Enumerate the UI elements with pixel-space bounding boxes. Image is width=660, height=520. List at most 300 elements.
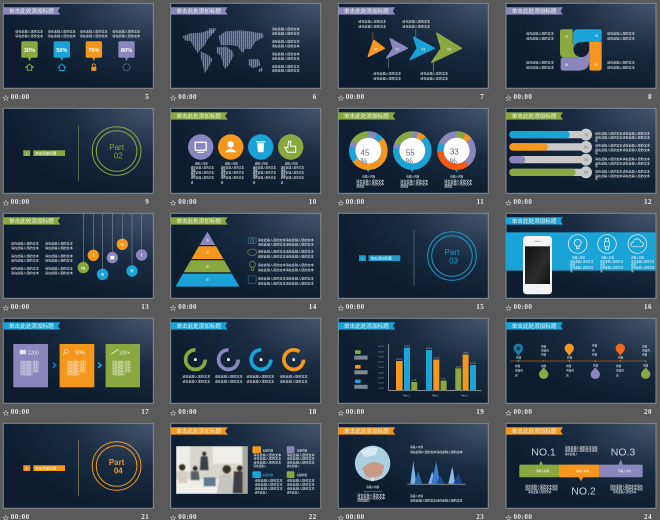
donut 55% value: 55	[406, 148, 415, 157]
text columns: 请在	[570, 262, 576, 266]
footer: 00:00	[346, 198, 365, 206]
right text: 请输入内容	[410, 445, 423, 449]
text blocks	[182, 374, 308, 383]
donut 55% value: %	[406, 157, 413, 166]
text blocks: 请在此输入您的文本	[48, 28, 76, 33]
text blocks: 请	[595, 138, 598, 142]
donut 45% value	[360, 148, 370, 166]
pinwheel diagram: 01	[565, 34, 568, 38]
timeline text: 内	[616, 373, 619, 377]
bar chart: 90.1%	[404, 345, 410, 347]
text columns: 请在此输入您的文本	[253, 175, 276, 179]
slide frame	[3, 318, 153, 403]
text columns: 请在此输入您的文本	[221, 165, 244, 169]
tri-colour bar: 请输入内容	[576, 469, 589, 473]
text blocks: 请在此输入您的文本请在此输入您的文本	[595, 143, 650, 148]
timeline	[510, 360, 647, 362]
panel: slide 18	[170, 318, 321, 416]
text blocks: 请在此输入您的文本请在此输入您的文本	[595, 156, 650, 161]
title ribbon	[171, 112, 228, 120]
pinwheel diagram	[560, 29, 602, 71]
text blocks: 请在此输入您的文本	[80, 33, 108, 38]
footer: 00:00	[178, 93, 197, 101]
panel: slide 10	[170, 108, 321, 206]
card: 100+: 请在此输入您的	[112, 366, 131, 370]
panel: slide 20	[506, 318, 656, 416]
progress bars: 30	[584, 145, 588, 149]
footer: 00:00	[514, 93, 532, 101]
footer: 16	[644, 303, 652, 311]
section label: 4	[26, 466, 28, 470]
timeline text: 内容	[515, 364, 521, 368]
feature text: 请在此输入您的文本	[253, 455, 281, 460]
text blocks: 请在此输入您的文本	[45, 253, 73, 258]
donut 55%	[396, 134, 428, 167]
card: 80%: 请在此输入您的	[67, 363, 86, 367]
text blocks: 请在此输入您的文本	[373, 70, 401, 75]
bar chart: Part 1	[403, 394, 410, 397]
text blocks: 请在此输入您的文本	[45, 240, 73, 245]
footer	[170, 198, 317, 206]
text columns: 请在	[281, 168, 286, 172]
text blocks: 请	[595, 164, 598, 168]
part label: Part	[109, 143, 125, 152]
handshake globe image	[355, 446, 390, 481]
slide frame	[338, 213, 488, 298]
title ribbon	[3, 217, 60, 225]
feature text: 请在此输入您的文本	[255, 477, 283, 482]
legend	[354, 350, 368, 389]
text blocks: 请在此输入您的文本请在	[565, 447, 598, 452]
donut 33%	[440, 134, 473, 167]
title ribbon: 单击此处添加标题	[344, 322, 389, 330]
text captions: 请在此	[444, 184, 452, 188]
donut 45% value: 45	[361, 148, 370, 157]
NO labels: NO.2	[571, 486, 596, 498]
text columns: 请在此输入您的文本	[600, 265, 624, 269]
divider line	[413, 230, 415, 286]
slide frame	[338, 318, 488, 403]
text blocks: 请在此输入您的文本请在此输入您的文本	[595, 130, 650, 135]
slide frame	[338, 423, 488, 508]
part label	[109, 143, 125, 160]
text blocks: 请在此输入您的文本	[11, 265, 39, 270]
title ribbon: 单击此处添加标题	[344, 112, 389, 120]
text columns: 请在	[191, 168, 196, 172]
feature text: 请在此输入	[287, 490, 300, 494]
pinwheel diagram: 02	[595, 34, 598, 38]
text captions	[356, 170, 472, 188]
text columns: 请在此输入您的文本	[191, 165, 214, 169]
panel: slide 12	[506, 108, 656, 206]
bar chart: 44.0%	[456, 366, 462, 368]
smartphone	[523, 236, 552, 294]
footer	[3, 513, 149, 520]
text blocks: 请在此输入您的文本	[272, 30, 300, 35]
text blocks: 请在此输入您的文本	[272, 68, 300, 73]
panel: slide 22	[170, 423, 321, 520]
progress bars: 70	[584, 133, 588, 137]
feature text: 请在此输入您的文本	[255, 481, 283, 486]
text blocks: 请在此输入您的文本请在此输入您的文本	[258, 237, 314, 242]
text columns: 请在此输入您的文本	[191, 175, 214, 179]
text columns: 请在	[600, 262, 606, 266]
text columns	[570, 255, 655, 273]
pyramid: 请	[206, 238, 209, 242]
pyramid: 请	[206, 250, 209, 254]
text columns	[191, 161, 304, 184]
feature text: 请在此输入	[253, 464, 267, 468]
text blocks: 请在此输入您的文本	[613, 490, 637, 494]
text blocks: 请在此输入您的文本请在此输入您的文本	[595, 135, 650, 140]
percentage tags	[21, 41, 135, 61]
panel: slide 7	[338, 3, 488, 101]
text blocks: 请在此输入您的文本请在此输入您的文本	[258, 281, 314, 286]
text blocks: 请在此输入您的文本请在	[610, 483, 643, 488]
card: 80%: 请在此输入您的	[67, 366, 86, 370]
text columns: 请输入内容	[631, 255, 644, 259]
card: 100+: 100+	[119, 350, 130, 356]
hanging social icons	[78, 213, 147, 280]
text blocks: 请在此输入您的文本	[215, 374, 243, 379]
slide frame	[3, 3, 153, 88]
text captions: 请在此	[400, 184, 408, 188]
footer: 8	[648, 93, 652, 101]
text columns: 请在	[253, 168, 258, 172]
text columns: 请在此输入您的文本	[281, 175, 304, 179]
donut 33% value	[450, 147, 459, 166]
text blocks: 请在此输入您的文本	[112, 28, 140, 33]
timeline text: 内容	[616, 364, 622, 368]
slide frame	[338, 108, 488, 193]
bar chart: 10.0%	[378, 388, 384, 390]
text blocks: 请在此输入您的文本	[402, 19, 430, 24]
arrow sequence: 01	[374, 47, 378, 51]
text columns: 请在此输入您的文本	[253, 165, 276, 169]
section label: 单击添加标题	[35, 150, 57, 155]
text columns: 请在	[221, 173, 226, 177]
text columns: 请	[191, 180, 194, 184]
feature text	[253, 448, 315, 494]
part label: Part	[109, 458, 125, 467]
arrow sequence: 03	[421, 47, 425, 51]
title ribbon: 单击此处添加标题	[512, 427, 557, 435]
feature text: 请在此输入您的文本	[287, 481, 315, 486]
title ribbon: 单击此处添加标题	[512, 7, 557, 15]
text blocks: 请	[595, 151, 598, 155]
text blocks: 请在此输入您的文本	[526, 35, 554, 40]
text columns: 请在此输入您的文本	[253, 170, 276, 174]
timeline text: 内容	[593, 363, 599, 367]
timeline text	[515, 343, 650, 377]
card: 1200: 请在此输入	[20, 372, 34, 376]
card: 80%: 请在此输入您的	[67, 360, 86, 364]
text columns: 请输入内容	[225, 161, 238, 165]
footer	[506, 93, 652, 101]
feature text: 请在此输入	[287, 464, 300, 468]
text blocks	[258, 237, 314, 286]
title ribbon: 单击此处添加标题	[512, 112, 557, 120]
footer: 00:00	[178, 303, 197, 311]
part label: Part	[445, 248, 460, 257]
footer	[170, 513, 317, 520]
slide frame	[171, 318, 321, 403]
text blocks: 请在此输入您的文本	[607, 59, 635, 64]
timeline text: 内容内	[566, 368, 574, 372]
text blocks: 请在此输入您的文本	[45, 270, 73, 275]
NO labels	[531, 446, 635, 498]
pinwheel diagram: 03	[594, 63, 598, 67]
card: 1200: 请在此输入您的	[20, 369, 39, 373]
slide frame	[171, 423, 321, 508]
text blocks: 请在此输入您的文本	[182, 378, 210, 383]
text captions: 请输入内容	[406, 174, 420, 178]
text columns: 请输入内容	[601, 255, 614, 259]
text blocks: 请在此输入您的文本请在此输入您的文本	[595, 173, 650, 178]
text columns: 请在	[253, 173, 258, 177]
footer: 18	[309, 408, 317, 416]
slide frame	[3, 108, 153, 193]
timeline text: 内容内	[642, 348, 650, 352]
footer: 14	[309, 303, 317, 311]
footer	[338, 303, 484, 311]
donut 33% value: %	[450, 157, 457, 166]
title ribbon	[171, 7, 228, 15]
footer: 15	[476, 303, 484, 311]
timeline text: 内容	[541, 352, 547, 356]
text blocks: 请在此输入您的文本	[420, 70, 448, 75]
footer	[338, 513, 484, 520]
section label	[23, 150, 65, 156]
ring centres	[194, 358, 295, 361]
text columns: 请在此输入您的文本	[221, 170, 244, 174]
title ribbon: 单击此处添加标题	[9, 7, 54, 15]
card: 100+: 请在此输入您的	[112, 363, 131, 367]
timeline text: 内	[592, 348, 595, 352]
text blocks: 请在此输入您的文本	[526, 59, 554, 64]
text columns: 请输入内容	[195, 161, 208, 165]
part rings	[92, 442, 141, 490]
text blocks: 请在此输入您的文本请在	[525, 486, 558, 491]
percentage tags: 30%	[24, 48, 35, 54]
bar chart: 40.0%	[378, 372, 384, 374]
panel: slide 9	[3, 108, 153, 206]
arrow	[98, 363, 101, 368]
text blocks: 请在此输入您的文本请在	[565, 444, 598, 449]
text blocks: 请在此输入您的文本	[373, 75, 401, 80]
text captions: 请在此输入您的文本	[444, 181, 472, 186]
timeline text: 内	[515, 373, 518, 377]
panel: slide 19	[338, 318, 488, 416]
panel: slide 5	[3, 3, 153, 101]
text blocks	[526, 30, 635, 69]
percentage tags: 50%	[56, 48, 67, 54]
NO labels: NO.3	[611, 446, 635, 458]
title ribbon	[506, 112, 563, 120]
footer: 5	[145, 93, 149, 101]
card: 1200	[13, 344, 48, 387]
text columns: 请	[631, 269, 634, 273]
text blocks: 请在此输入您的文本请在	[525, 483, 558, 488]
feature text: 请在此输入您的文本	[255, 485, 283, 490]
percentage tags: 70%	[88, 48, 100, 54]
footer: 00:00	[178, 408, 197, 416]
text blocks: 请在此输入您的文本	[11, 258, 39, 263]
card: 1200: 请在此输入您的	[20, 360, 39, 364]
footer	[3, 93, 149, 101]
bar chart: 74.1%	[434, 357, 440, 359]
footer: 9	[145, 198, 149, 206]
hanging social icons: P	[130, 269, 134, 274]
part rings	[428, 232, 476, 280]
footer: 6	[313, 93, 317, 101]
slide frame	[506, 213, 656, 298]
footer: 00:00	[11, 408, 30, 416]
title ribbon: 单击此处添加标题	[344, 427, 389, 435]
text blocks: 请在此输入您的文本	[11, 270, 39, 275]
text columns: 请	[600, 269, 603, 273]
title ribbon	[338, 427, 395, 435]
timeline text: 内容	[618, 355, 624, 359]
timeline text: 内容	[642, 352, 648, 356]
title ribbon	[506, 322, 563, 330]
text columns: 请在此输入您的文本	[570, 259, 594, 263]
slide frame	[3, 213, 153, 298]
text captions: 请在此输入您的文本	[400, 181, 428, 186]
timeline text: 内容	[516, 355, 522, 359]
hanging social icons: f	[93, 253, 95, 258]
text blocks: 请在此输入您的文本	[526, 64, 554, 69]
section label	[359, 255, 400, 261]
slide frame	[3, 423, 153, 508]
text blocks: 请在此输入您的文本请在	[610, 486, 643, 491]
pyramid	[175, 232, 239, 287]
section label: 3	[361, 256, 363, 260]
text captions: 请在此输入您的文本	[400, 178, 428, 183]
title ribbon	[506, 7, 563, 15]
slide frame	[506, 318, 656, 403]
card: 100+: 请在此输入您的	[112, 369, 131, 373]
feature text: 请在此输入您的文本	[287, 485, 315, 490]
bar chart	[378, 344, 481, 397]
text blocks: 请在此输入您的文本	[272, 43, 300, 48]
panel: slide 11	[338, 108, 488, 206]
title ribbon: 单击此处添加标题	[512, 322, 557, 330]
title ribbon: 单击此处添加标题	[176, 7, 222, 15]
arrow	[53, 363, 56, 368]
footer: 00:00	[514, 303, 532, 311]
text blocks: 请在此输入您的文本请在此输入您的文本	[258, 262, 314, 267]
text blocks: 请在此输入您的文本	[358, 19, 386, 24]
text captions: 请在此输入您的文本	[444, 178, 472, 183]
timeline text: 内容	[642, 344, 648, 348]
connectors	[373, 29, 433, 71]
text blocks: 请在此输入您的文本请在此输入您的文本	[258, 276, 314, 281]
title ribbon	[338, 322, 395, 330]
footer	[338, 198, 484, 206]
footer	[506, 198, 652, 206]
card: 100+: 请在此输入您的	[112, 360, 131, 364]
text columns: 请在此输入您的文本	[600, 259, 624, 263]
text blocks	[15, 28, 140, 38]
office meeting photo	[176, 446, 248, 494]
footer	[170, 303, 317, 311]
hanging social icons: in	[81, 265, 86, 270]
card: 1200: 1200	[28, 350, 39, 356]
text blocks: 请在此输入您的文本	[402, 23, 430, 28]
timeline text: 内容	[567, 355, 573, 359]
footer	[506, 408, 652, 416]
footer: 00:00	[178, 198, 197, 206]
spike chart	[407, 461, 465, 484]
text columns: 请在此输入您的文本	[281, 165, 304, 169]
text blocks: 请在此输入您的文本	[272, 26, 300, 31]
feature text: 标题内容	[263, 473, 273, 477]
tri-colour bar: 请输入内容	[618, 469, 631, 473]
footer: 13	[141, 303, 149, 311]
text blocks: 请在此输入您的文本	[45, 258, 73, 263]
section label	[23, 465, 65, 471]
text blocks: 请	[595, 176, 598, 180]
caption	[357, 485, 385, 502]
text captions: 请在此输入您的文本	[356, 178, 384, 183]
footer: 7	[480, 93, 484, 101]
bar chart: Part 2	[432, 394, 439, 397]
bar chart: 76.2%	[396, 359, 402, 361]
text blocks: 请在此输入您的文本请在此输入您的文本	[258, 254, 314, 259]
progress rings	[186, 350, 304, 369]
bar chart: 5.5%	[441, 378, 446, 380]
arrow sequence: 04	[447, 47, 451, 51]
footer: 00:00	[514, 408, 532, 416]
slide frame	[506, 3, 656, 88]
caption: 请在此输入	[357, 498, 371, 502]
title ribbon: 单击此处添加标题	[176, 322, 222, 330]
bar chart: 70.0%	[378, 356, 384, 358]
hanging social icons: S	[101, 272, 104, 277]
text columns: 请在此输入您的文本	[221, 175, 244, 179]
text blocks: 请在此输入您的文本	[215, 378, 243, 383]
arrow sequence: 02	[395, 47, 399, 51]
text columns: 请	[570, 269, 573, 273]
feature text: 请在此输入您的文本	[287, 452, 315, 457]
outline icon circles	[568, 235, 647, 253]
caption: 请输入内容	[366, 485, 380, 489]
bar chart: 65.1%	[470, 363, 476, 365]
text blocks: 请在此输入您的文本	[272, 55, 300, 60]
right text: 请在此输入您的文本请在此输入您的文本	[410, 449, 463, 454]
footer	[170, 93, 317, 101]
feature icons	[252, 446, 294, 478]
panel: slide 23	[338, 423, 488, 520]
panel: slide 8	[506, 3, 656, 101]
text columns: 请在	[191, 173, 196, 177]
footer	[338, 93, 484, 101]
text blocks: 请在此输入您的文本	[80, 28, 108, 33]
timeline text: 内容内	[541, 348, 549, 352]
bar chart: 90.0%	[378, 346, 384, 348]
slide frame	[506, 108, 656, 193]
text blocks: 请在此输入您的文本请在此输入您的文本	[258, 249, 314, 254]
title ribbon: 单击此处添加标题	[9, 322, 54, 330]
footer: 19	[476, 408, 484, 416]
right text: 请输入内容	[410, 494, 423, 498]
hanging social icons: t	[141, 253, 143, 258]
title ribbon	[171, 322, 228, 330]
donut 55% value	[406, 148, 415, 166]
part label: 02	[114, 151, 123, 160]
feature text: 请在此输入您的文本	[253, 459, 281, 464]
